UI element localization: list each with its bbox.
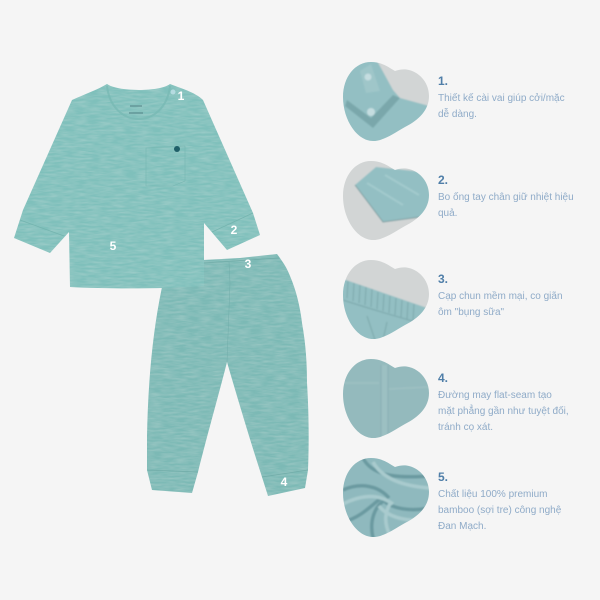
number 5: 5.	[438, 470, 448, 484]
description 4: Đường may flat-seam tạo	[438, 390, 552, 401]
heart photo: bamboo fabric swirl	[343, 458, 429, 537]
logo on pocket	[174, 146, 180, 152]
chest pocket	[146, 146, 185, 186]
callout number 1: 1	[178, 89, 185, 103]
heart photo: sleeve cuff	[343, 161, 429, 240]
description 3: Cạp chun mềm mại, co giãn	[438, 290, 563, 302]
callout number 3: 3	[245, 257, 252, 271]
feature 1	[340, 59, 565, 145]
feature 5	[340, 455, 562, 541]
long-sleeve shirt	[14, 84, 260, 288]
description 4: mặt phẳng gần như tuyệt đối,	[438, 404, 569, 417]
number 2: 2.	[438, 173, 448, 187]
neck label	[129, 106, 143, 113]
description 5: Chất liệu 100% premium	[438, 488, 548, 500]
description 1: dễ dàng.	[438, 107, 477, 120]
heart photo: elastic waistband	[343, 260, 429, 339]
pajama pants	[147, 254, 309, 496]
number 3: 3.	[438, 272, 448, 286]
description 1: Thiết kế cài vai giúp cởi/mặc	[438, 92, 565, 104]
shoulder button	[170, 90, 176, 94]
feature 4	[340, 356, 569, 442]
number 4: 4.	[438, 371, 448, 385]
callout number 4: 4	[281, 475, 288, 489]
description 5: bamboo (sợi tre) công nghệ	[438, 505, 562, 516]
description 2: Bo ống tay chân giữ nhiệt hiệu	[438, 191, 574, 203]
number 1: 1.	[438, 74, 448, 88]
description 2: quả.	[438, 208, 457, 219]
heart photo: flat seam	[343, 359, 429, 438]
callout number 5: 5	[110, 239, 117, 253]
feature 2	[340, 158, 574, 244]
heart photo: shoulder buttons	[343, 62, 429, 141]
callout number 2: 2	[231, 223, 238, 237]
description 3: ôm "bụng sữa"	[438, 307, 504, 318]
description 4: tránh cọ xát.	[438, 422, 493, 433]
feature 3	[340, 257, 563, 343]
description 5: Đan Mạch.	[438, 521, 486, 532]
